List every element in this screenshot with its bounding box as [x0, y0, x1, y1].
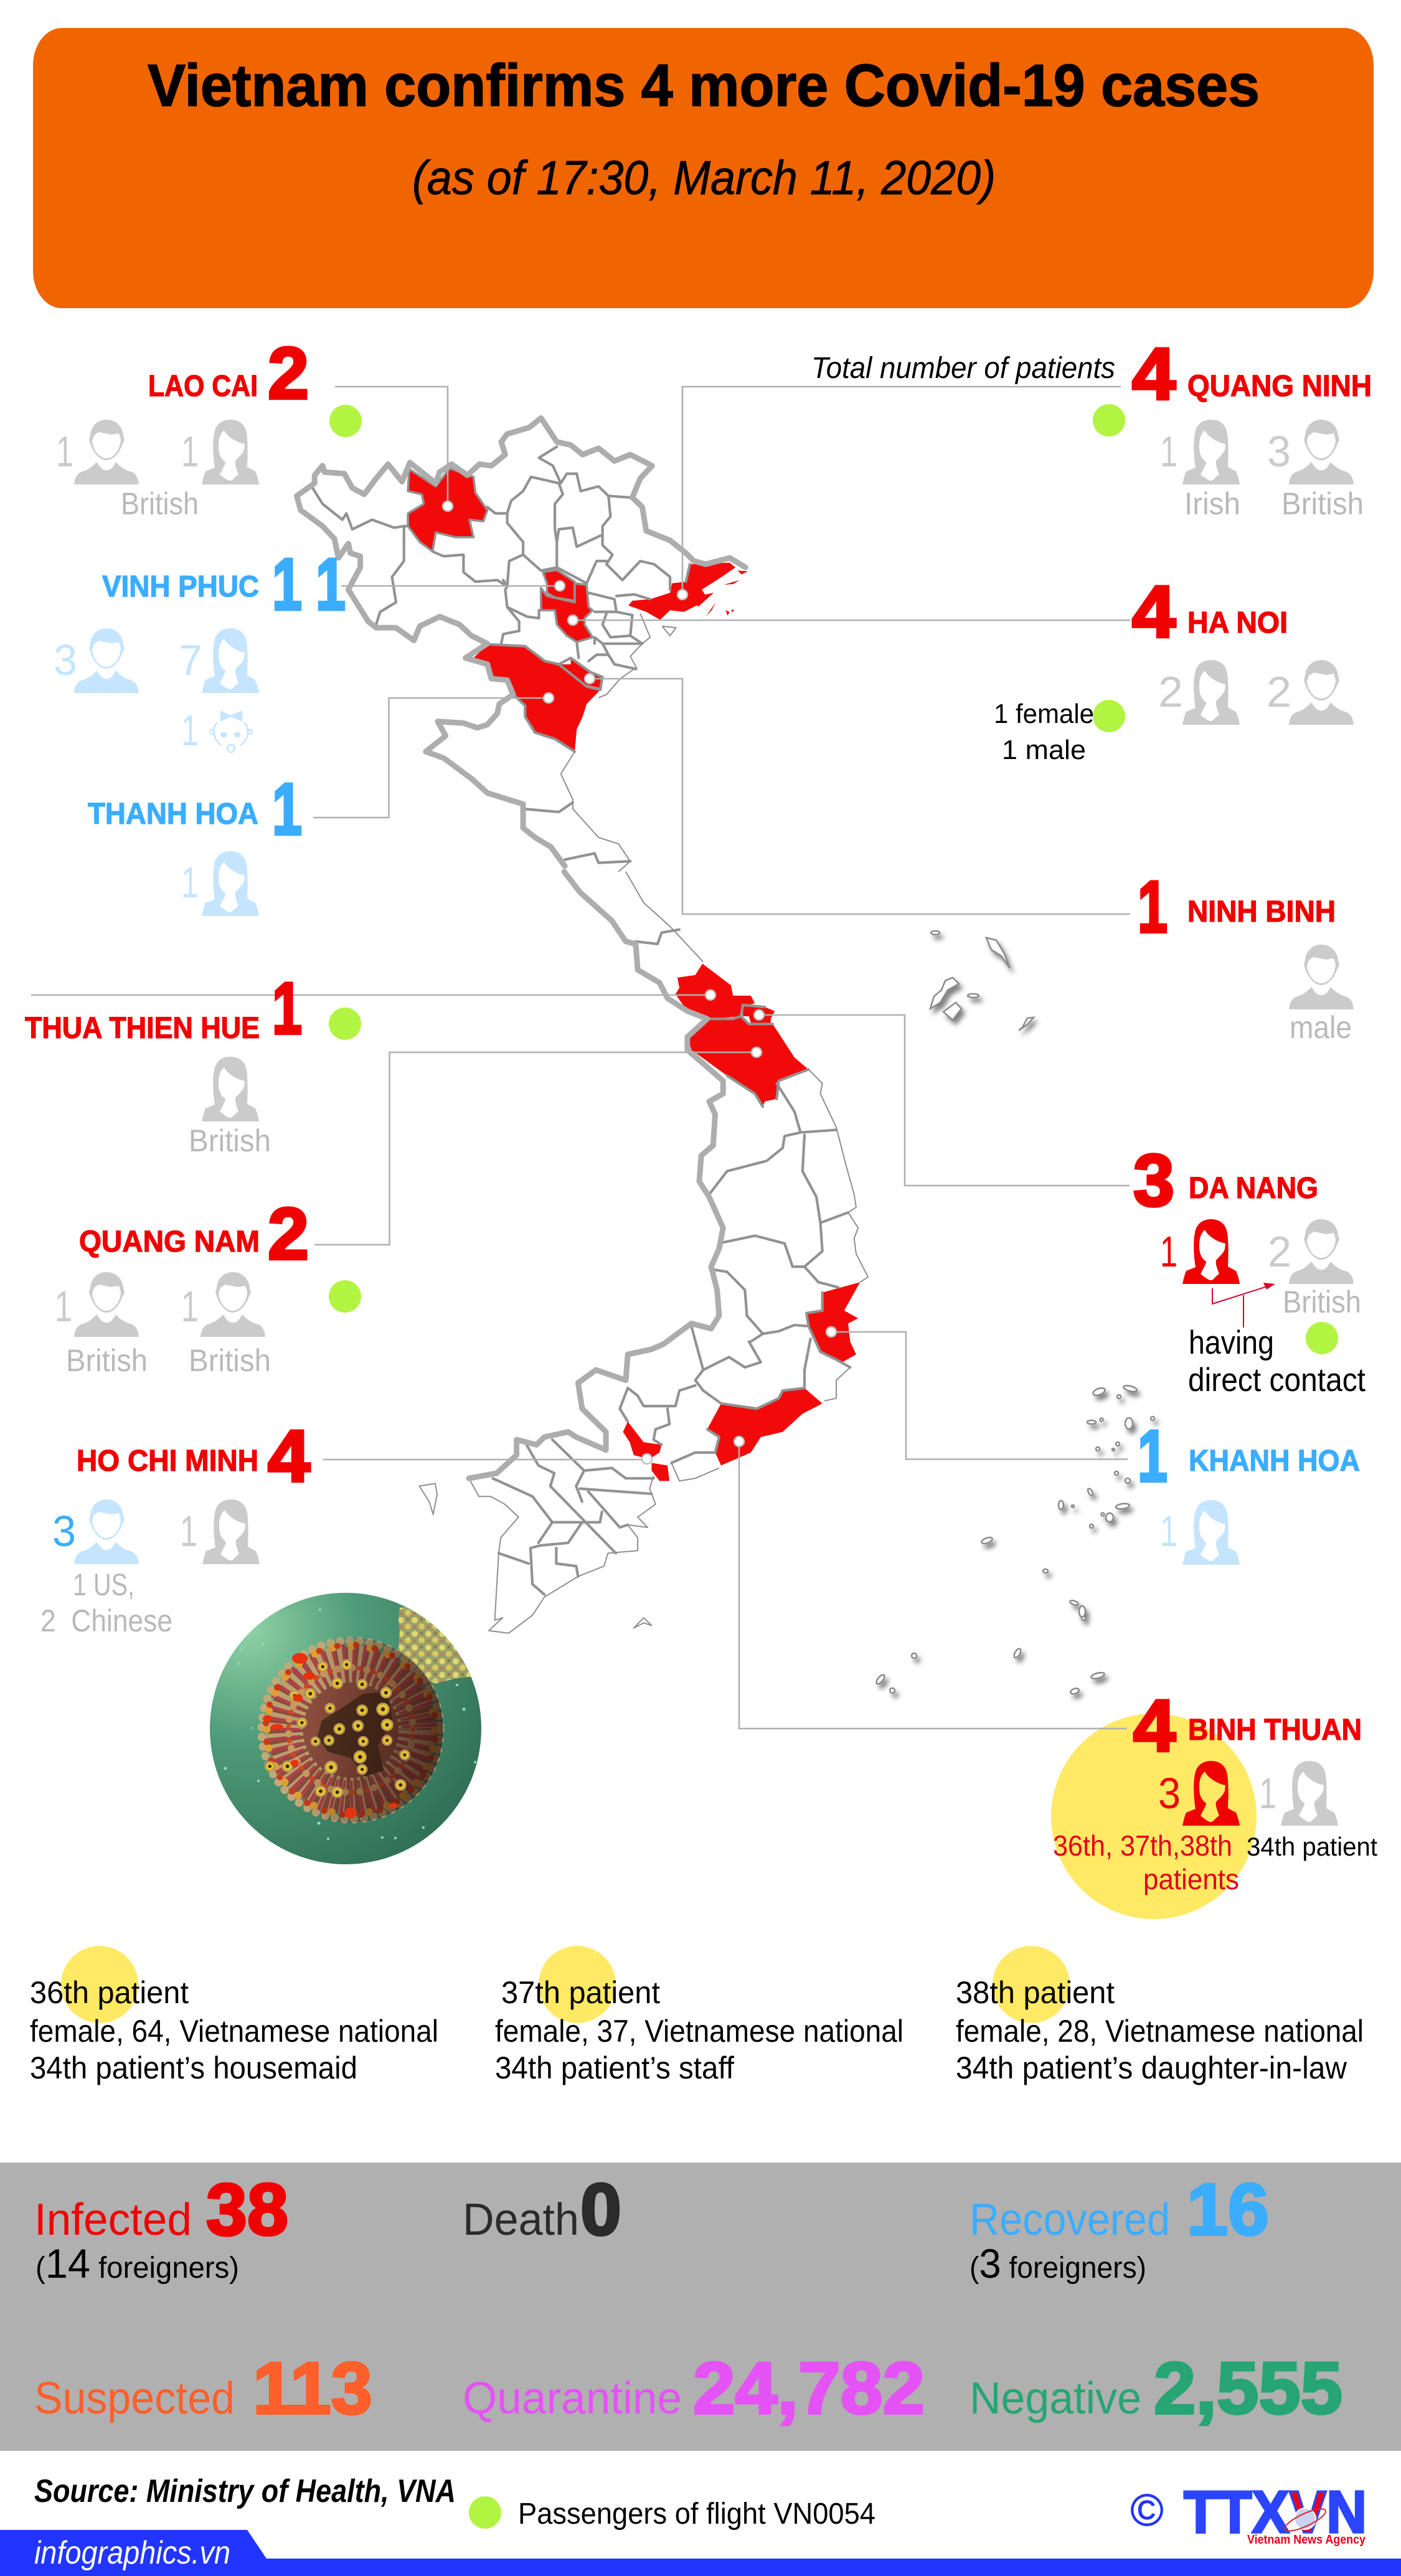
count: 1 — [1138, 866, 1168, 948]
two female: 2 — [1158, 668, 1183, 716]
text block: 38th patient: 38th patient — [956, 1975, 1115, 2010]
patient note: 1 female — [994, 699, 1094, 729]
red province: Lao Cai — [408, 468, 488, 552]
one female: 1 — [1259, 1769, 1276, 1818]
flight dot — [1093, 404, 1125, 436]
panel: Khanh Hoa — [1138, 1415, 1360, 1565]
count — [272, 544, 346, 626]
globe with orbit — [1282, 2505, 1328, 2535]
count: 1 — [1138, 1415, 1168, 1498]
label: DA NANG — [1189, 1172, 1318, 1205]
icon: woman — [202, 628, 259, 693]
offshore islands — [875, 931, 1154, 1695]
label: HA NOI — [1187, 606, 1288, 639]
stat: recovered — [969, 2169, 1269, 2251]
title: Vietnam confirms 4 more Covid-19 cases — [148, 52, 1260, 119]
dark virus core — [318, 1692, 392, 1776]
connector lines — [31, 387, 1130, 1729]
tagline: Vietnam News Agency — [1247, 2533, 1366, 2547]
one female: 1 — [1160, 427, 1177, 476]
patient note: 1 male — [1002, 735, 1086, 765]
icon: man — [1289, 420, 1354, 484]
neighbouring virus — [399, 1607, 471, 1684]
count: 4 — [1133, 1685, 1176, 1767]
map: northern Vietnam — [297, 418, 748, 872]
flight dot — [329, 1007, 361, 1040]
icon: man — [74, 420, 139, 484]
icon: man — [200, 1272, 265, 1337]
stat: infected: Infected — [34, 2195, 192, 2245]
northern coastline — [561, 613, 676, 872]
icon: man — [74, 1499, 139, 1564]
panel: Da Nang — [1133, 1139, 1366, 1399]
nationalities: 2 Chinese — [40, 1603, 172, 1638]
patient ids: patients — [1143, 1863, 1239, 1895]
stat: infected: 38 — [206, 2169, 288, 2251]
arrow: direct contact — [1212, 1283, 1275, 1328]
floating particles — [224, 1608, 476, 1840]
three male: 3 — [1267, 427, 1291, 476]
header banner — [33, 28, 1374, 308]
count: 1 — [272, 544, 302, 626]
count: 4 — [1132, 333, 1176, 415]
map: central and southern Vietnam — [419, 872, 868, 1633]
stat: suspected: 113 — [253, 2347, 372, 2430]
stat: negative: Negative — [969, 2374, 1141, 2423]
stat: negative — [969, 2347, 1342, 2430]
text block: 36th patient: female, 64, Vietnamese national — [30, 2014, 438, 2049]
foreigners note: (14 foreigners) — [35, 2240, 239, 2286]
stat: recovered: Recovered — [969, 2195, 1170, 2245]
flight dot — [329, 405, 362, 437]
count: 1 — [272, 968, 302, 1050]
logo: TTXVN — [1130, 2479, 1367, 2547]
stat: death: 0 — [580, 2169, 621, 2251]
one male: 1 — [56, 427, 73, 476]
blue strip and tab — [0, 2530, 1401, 2576]
southern province boundaries — [493, 930, 850, 1595]
icon: man — [1289, 945, 1354, 1009]
red province: Thanh Hoa — [473, 644, 600, 752]
flight dot — [1306, 1322, 1338, 1354]
icon: baby — [210, 712, 252, 752]
stat: recovered: 16 — [1187, 2169, 1269, 2251]
stat: suspected: Suspected — [34, 2374, 235, 2423]
label: THUA THIEN HUE — [25, 1012, 260, 1045]
province location dots — [443, 501, 836, 1464]
icon: woman — [1182, 1500, 1240, 1565]
icon: woman — [1182, 420, 1240, 484]
nationality: British — [66, 1343, 148, 1378]
northern province boundaries — [313, 446, 690, 863]
panel: Quang Ninh — [811, 333, 1372, 521]
panel: Lao Cai — [56, 333, 362, 521]
label: KHANH HOA — [1189, 1445, 1360, 1478]
text block: 38th patient: 34th patient’s daughter-in-law — [956, 2050, 1347, 2085]
wordmark: TTXVN — [1184, 2479, 1367, 2545]
label: NINH BINH — [1187, 895, 1336, 928]
three female: 3 — [1158, 1769, 1181, 1818]
flight dot — [329, 1280, 361, 1313]
red province: Thua Thien Hue — [676, 964, 755, 1019]
icon: woman — [1182, 1219, 1240, 1284]
red province: Vinh Phuc — [543, 570, 575, 601]
red province: Quang Ninh — [628, 563, 748, 620]
stat: death: Death — [463, 2195, 579, 2245]
red province: Binh Thuan — [707, 1388, 823, 1465]
one male: 1 — [181, 1282, 199, 1331]
panel: Quang Nam — [55, 1193, 361, 1378]
panel: Thua Thien Hue — [25, 968, 361, 1158]
panel: Ha Noi — [994, 571, 1354, 765]
stat: negative: 2,555 — [1154, 2347, 1342, 2430]
stat: quarantine — [463, 2347, 925, 2430]
stat: quarantine: 24,782 — [693, 2347, 925, 2430]
icon: woman — [202, 1499, 260, 1564]
text block: 36th patient — [30, 1975, 438, 2085]
icon: man — [74, 628, 139, 693]
icon: woman — [202, 420, 259, 484]
red province: Khanh Hoa — [806, 1282, 860, 1362]
text block: 37th patient — [495, 1975, 903, 2085]
count: 1 — [316, 544, 346, 626]
icon: man — [1289, 660, 1354, 725]
spike centres — [268, 1663, 407, 1794]
stat: death — [463, 2169, 621, 2251]
foreigners note: (3 foreigners) — [969, 2240, 1146, 2286]
text block: 37th patient: 34th patient’s staff — [495, 2050, 734, 2085]
nationality: British — [121, 486, 199, 521]
red province: Ha Noi — [541, 583, 593, 642]
panel: Thanh Hoa — [88, 768, 302, 916]
panel background — [0, 2163, 1401, 2451]
subtitle: (as of 17:30, March 11, 2020) — [412, 151, 996, 205]
icon: woman — [202, 1057, 259, 1121]
two male: 2 — [1268, 1227, 1291, 1276]
label: QUANG NAM — [79, 1225, 260, 1258]
bright red spikes on the left — [263, 1653, 397, 1818]
illustration: coronavirus — [205, 1588, 486, 1868]
count: 2 — [268, 333, 309, 415]
label: LAO CAI — [148, 370, 258, 403]
three male: 3 — [52, 1507, 76, 1555]
count: 2 — [268, 1193, 309, 1275]
text block: 38th patient: female, 28, Vietnamese national — [956, 2014, 1364, 2049]
one female: 1 — [181, 858, 199, 907]
note: direct contact — [1188, 1362, 1366, 1399]
patient ids: 36th, 37th,38th — [1053, 1829, 1232, 1862]
nationality: Irish — [1184, 486, 1240, 521]
patient highlight: 38th — [993, 1946, 1070, 2023]
stat: quarantine: Quarantine — [463, 2374, 682, 2423]
panel: Vinh Phuc — [54, 544, 346, 755]
icon: man — [1289, 1219, 1354, 1284]
northern border — [297, 418, 745, 866]
two male: 2 — [1267, 668, 1291, 716]
patient id: 34th patient — [1247, 1832, 1377, 1861]
shaded right side — [308, 1638, 443, 1822]
label: VINH PHUC — [102, 570, 259, 603]
label: HO CHI MINH — [77, 1445, 258, 1478]
text block: 38th patient — [956, 1975, 1364, 2085]
text block: 37th patient: female, 37, Vietnamese national — [495, 2014, 903, 2049]
panel: Ho Chi Minh — [40, 1415, 310, 1638]
virus body — [258, 1638, 443, 1823]
text block: 36th patient: 34th patient’s housemaid — [30, 2050, 357, 2085]
icon: woman — [202, 851, 259, 916]
highlight circle behind Binh Thuan — [1051, 1714, 1257, 1919]
stat: suspected — [34, 2347, 372, 2430]
website: infographics.vn — [34, 2535, 230, 2571]
text block: 36th patient: 36th patient — [30, 1975, 189, 2010]
legend text: Passengers of flight VN0054 — [518, 2498, 875, 2531]
gender note: male — [1290, 1010, 1352, 1045]
count: 4 — [268, 1415, 310, 1498]
red province: Quang Nam — [687, 1016, 808, 1106]
seven female: 7 — [179, 636, 202, 684]
nationality: British — [1283, 1285, 1361, 1319]
footer bar — [0, 2530, 1401, 2576]
legend dot — [469, 2496, 501, 2529]
text block: 37th patient: 37th patient — [501, 1975, 660, 2010]
one male: 1 — [55, 1282, 72, 1331]
red province: Ho Chi Minh — [623, 1422, 669, 1481]
label: BINH THUAN — [1188, 1714, 1362, 1747]
one female: 1 — [181, 427, 199, 476]
icon: man — [74, 1272, 139, 1337]
patient highlight: 36th — [61, 1946, 138, 2023]
caption: Total number of patients — [811, 352, 1115, 385]
label: THANH HOA — [88, 798, 258, 831]
one female: 1 — [1160, 1227, 1177, 1276]
one female: 1 — [180, 1507, 197, 1555]
one baby: 1 — [181, 706, 199, 755]
southern coastline — [419, 872, 868, 1633]
copyright mark: © — [1130, 2486, 1164, 2536]
nationality: British — [189, 1343, 271, 1378]
label: QUANG NINH — [1187, 370, 1372, 403]
count: 1 — [272, 768, 302, 851]
icon: woman — [1182, 1761, 1240, 1826]
three male: 3 — [54, 636, 77, 684]
nationality: British — [1281, 486, 1364, 521]
note: having — [1189, 1324, 1274, 1361]
count: 4 — [1132, 571, 1176, 653]
icon: woman — [1182, 660, 1240, 725]
red province: Da Nang — [743, 1005, 775, 1024]
one female: 1 — [1160, 1507, 1177, 1555]
source: Source: Ministry of Health, VNA — [34, 2473, 456, 2509]
spike heads — [265, 1660, 409, 1797]
panel: Binh Thuan — [1053, 1685, 1377, 1895]
nationalities: 1 US, — [73, 1567, 134, 1602]
red province: Ninh Binh — [559, 658, 603, 688]
nationality: British — [189, 1123, 271, 1158]
count: 3 — [1133, 1139, 1174, 1222]
statistics panel — [0, 2163, 1401, 2451]
icon: woman — [1281, 1761, 1338, 1826]
patient highlight: 37th — [539, 1946, 616, 2023]
banner background — [33, 28, 1374, 308]
stat: infected — [34, 2169, 288, 2251]
panel: Ninh Binh — [1138, 866, 1354, 1045]
flight dot — [1093, 700, 1125, 732]
southern border — [469, 872, 723, 1478]
